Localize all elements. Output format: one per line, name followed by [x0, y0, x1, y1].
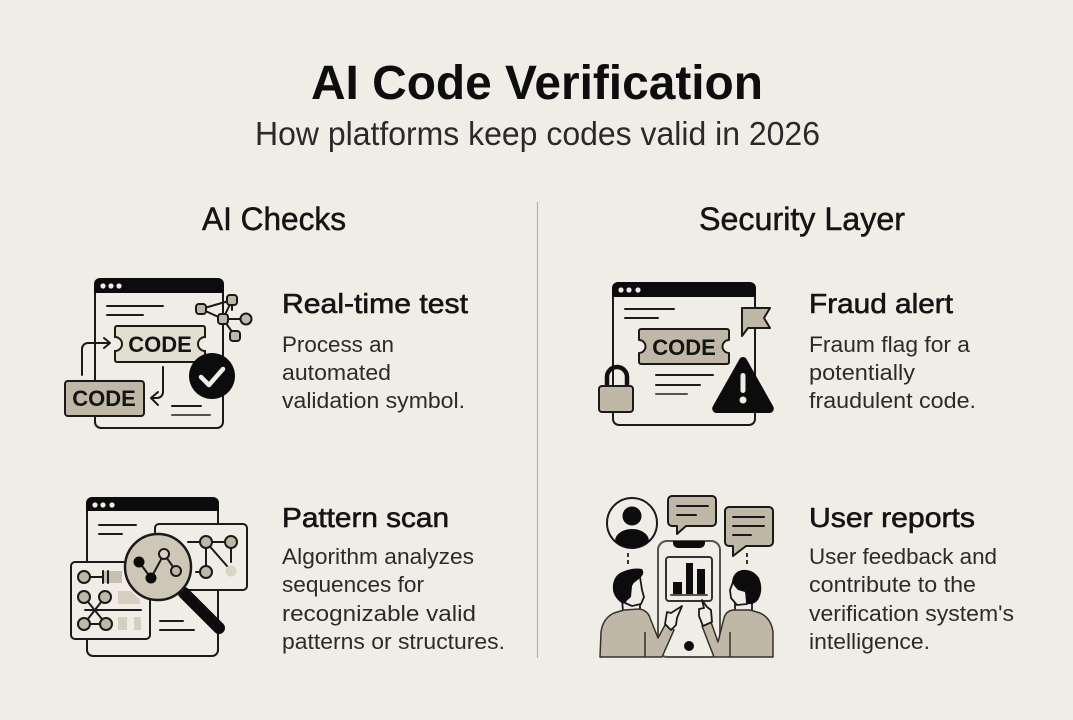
icon: user reports	[600, 496, 773, 657]
heading: AI Checks: AI Checks	[202, 201, 346, 237]
text block: user reports	[809, 502, 1014, 654]
text block: fraud alert: Fraum flag for a	[809, 332, 970, 357]
left person	[600, 568, 682, 657]
text block: user reports: User reports	[809, 502, 975, 533]
heading: Security Layer: Security Layer	[699, 201, 905, 237]
text block: pattern scan	[282, 502, 505, 654]
icon: real-time test	[65, 278, 252, 428]
text block: pattern scan: patterns or structures.	[282, 629, 505, 654]
text block: fraud alert: Fraud alert	[809, 288, 953, 319]
subtitle: How platforms keep codes valid in 2026	[255, 115, 820, 152]
icon: fraud alert: CODE	[652, 335, 716, 360]
text block: user reports: contribute to the	[809, 572, 976, 597]
text block: pattern scan: recognizable valid	[282, 601, 476, 626]
text block: user reports: verification system's	[809, 601, 1014, 626]
icon: pattern scan	[71, 497, 247, 656]
right person	[699, 570, 773, 657]
text block: real-time test: Process an	[282, 332, 394, 357]
icon: real-time test: CODE	[128, 332, 192, 357]
text block: pattern scan: Pattern scan	[282, 502, 449, 533]
text block: fraud alert: potentially	[809, 360, 916, 385]
text block: user reports: User feedback and	[809, 544, 997, 569]
text block: real-time test: automated	[282, 360, 391, 385]
text block: fraud alert	[809, 288, 976, 413]
text block: fraud alert: fraudulent code.	[809, 388, 976, 413]
text block: real-time test	[282, 288, 468, 413]
title: AI Code Verification	[311, 57, 763, 110]
text block: user reports: intelligence.	[809, 629, 930, 654]
text block: pattern scan: sequences for	[282, 572, 425, 597]
text block: pattern scan: Algorithm analyzes	[282, 544, 474, 569]
icon: real-time test: CODE	[72, 386, 136, 411]
icon: fraud alert	[599, 282, 774, 425]
text block: real-time test: validation symbol.	[282, 388, 465, 413]
text block: real-time test: Real-time test	[282, 288, 468, 319]
